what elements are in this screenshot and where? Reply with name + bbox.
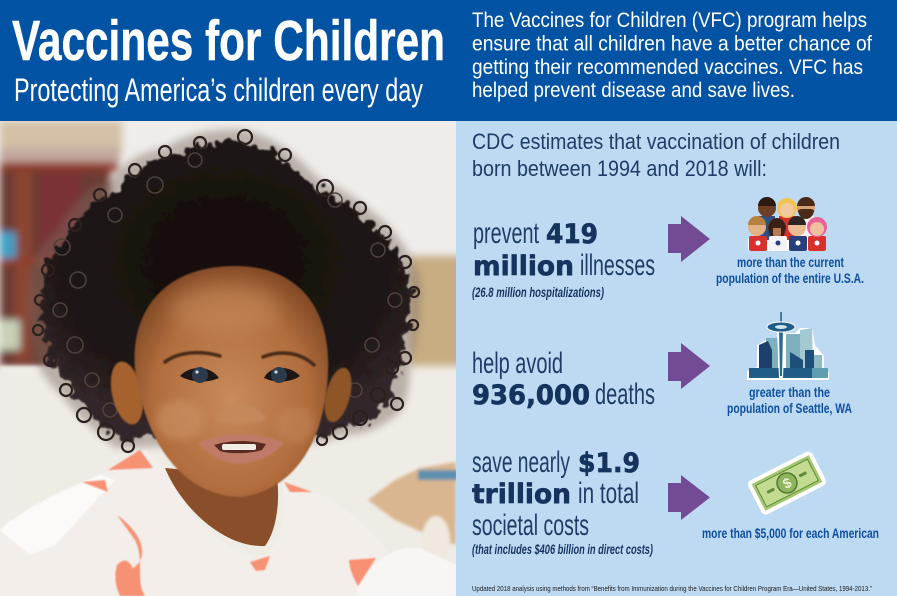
stat: societal costs: (that includes $406 billion in direct costs) [472, 541, 653, 557]
icon: dollar bill: $ [780, 474, 794, 492]
arrow 3 [668, 475, 710, 520]
stat: societal costs: trillion [472, 479, 571, 510]
arrow 2 [668, 343, 710, 389]
stat: deaths: deaths [595, 378, 655, 411]
stat: societal costs [472, 446, 653, 557]
shirt [0, 450, 456, 596]
photo: smiling toddler [0, 121, 466, 596]
intro paragraph [472, 9, 872, 102]
stat: societal costs: societal costs [472, 509, 589, 542]
subtitle: Protecting America’s children every day [14, 72, 423, 108]
icon: group of children [748, 197, 827, 251]
photo background: basket [410, 256, 466, 366]
intro paragraph: ensure that all children have a better chance of [472, 32, 872, 56]
stat: deaths: help avoid [472, 347, 563, 380]
stat: illnesses: 419 [546, 219, 598, 250]
hair [27, 129, 421, 452]
photo background: bookshelf [0, 121, 122, 367]
stat: societal costs: save nearly [472, 446, 570, 479]
comparison label: Seattle: population of Seattle, WA [727, 400, 852, 416]
title: Vaccines for Children [12, 9, 445, 73]
stat: illnesses: prevent [473, 217, 539, 250]
intro paragraph: helped prevent disease and save lives. [472, 79, 795, 102]
lead-in text [472, 129, 840, 181]
stat: illnesses: (26.8 million hospitalizations) [472, 284, 604, 300]
comparison label: U.S. population [716, 254, 864, 286]
photo background: wooden toy [368, 462, 458, 564]
icon: Seattle skyline [747, 312, 829, 380]
comparison label: Seattle [727, 384, 852, 416]
eyebrows [165, 353, 314, 365]
icon: dollar bill [746, 450, 828, 516]
lead-in text: born between 1994 and 2018 will: [472, 156, 767, 181]
ears [106, 359, 356, 427]
lead-in text: CDC estimates that vaccination of children [472, 129, 840, 154]
stat: societal costs: in total [578, 477, 639, 510]
eyes [180, 367, 300, 383]
mouth [198, 435, 284, 464]
stat: deaths: 936,000 [472, 380, 590, 411]
comparison label: U.S. population: more than the current [737, 254, 844, 270]
shirt orange pattern [82, 450, 376, 596]
header band [0, 0, 897, 121]
photo background: floor [0, 366, 456, 596]
nose [216, 404, 266, 424]
stat: illnesses [472, 217, 655, 300]
face and neck [135, 266, 328, 546]
stat: deaths [472, 347, 655, 411]
arrow 1 [668, 216, 710, 262]
intro paragraph: getting their recommended vaccines. VFC has [472, 56, 863, 79]
comparison label: Seattle: greater than the [749, 384, 830, 400]
stat: illnesses: million [473, 251, 574, 282]
stat: illnesses: illnesses [580, 249, 655, 282]
stat: societal costs: $1.9 [578, 448, 640, 479]
hair curls [33, 130, 419, 452]
